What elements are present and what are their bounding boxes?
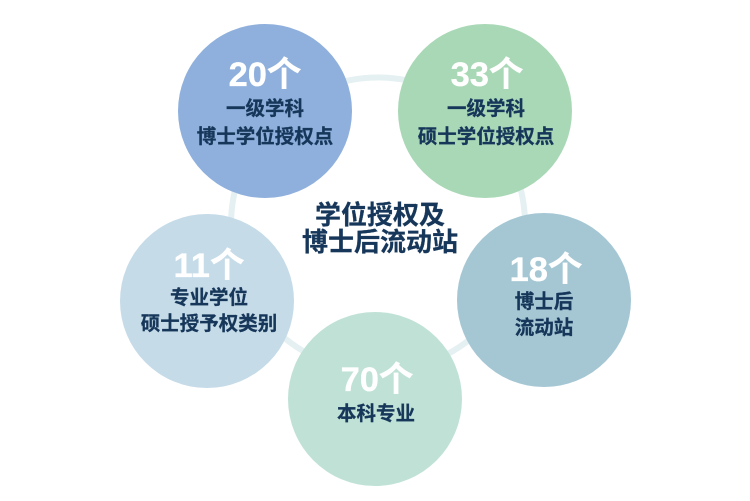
panel: postdoctoral stations <box>457 213 631 387</box>
panel: undergraduate majors <box>288 312 462 486</box>
label: doctoral points: 一级学科 <box>226 98 304 120</box>
label: professional: 专业学位 <box>170 287 248 309</box>
label: professional: 硕士授予权类别 <box>141 313 277 335</box>
label: master points: 硕士学位授权点 <box>418 126 554 148</box>
label: postdoctoral: 流动站 <box>515 317 573 339</box>
number: 33: 33个 <box>451 56 523 94</box>
label: undergraduate: 本科专业 <box>337 403 415 425</box>
panel: doctoral first-level disciplines <box>178 24 352 198</box>
label: postdoctoral: 博士后 <box>515 291 573 313</box>
label: doctoral points: 博士学位授权点 <box>197 126 333 148</box>
number: 18: 18个 <box>510 251 582 289</box>
panel: master first-level disciplines <box>398 24 572 198</box>
number: 11: 11个 <box>174 247 244 285</box>
panel: professional master categories <box>120 214 294 388</box>
label: professional <box>141 286 277 335</box>
label: postdoctoral <box>515 291 573 339</box>
label: master points <box>418 98 554 148</box>
label: master points: 一级学科 <box>447 98 525 120</box>
title: 博士后流动站 <box>302 227 458 257</box>
title: 学位授权及 <box>315 200 445 230</box>
label: doctoral points <box>197 98 333 148</box>
number: 70: 70个 <box>341 361 413 399</box>
title <box>302 200 458 257</box>
number: 20: 20个 <box>229 56 301 94</box>
